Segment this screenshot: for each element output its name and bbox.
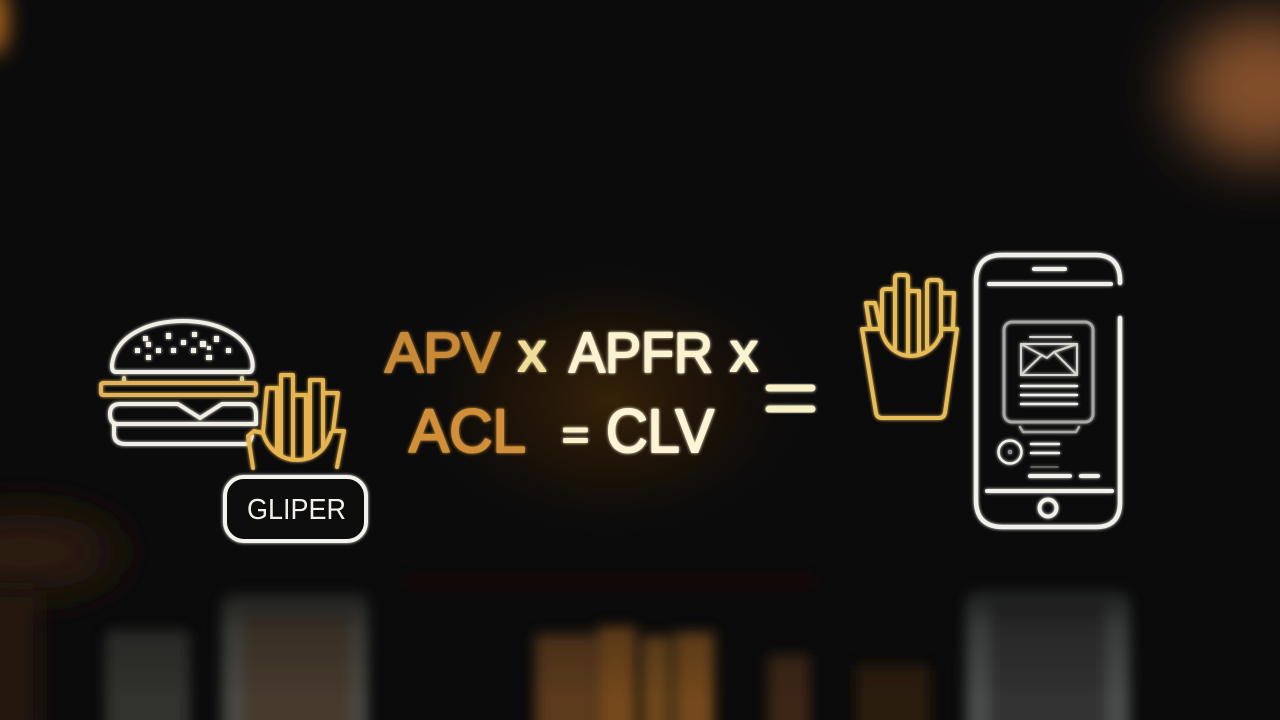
phone body (976, 255, 1120, 527)
icon: burger (101, 321, 256, 444)
multiply sign: x (730, 320, 758, 383)
reflection of phone (966, 590, 1130, 720)
large equals sign (769, 388, 812, 409)
burger cheese and lower bun (110, 404, 256, 424)
home button (1040, 500, 1056, 516)
icon: fries box (862, 275, 957, 418)
screen card (1004, 322, 1093, 422)
term APV: APV (385, 321, 500, 385)
term APFR: APFR (569, 321, 713, 385)
icon: fries beside burger (248, 375, 344, 468)
faint reflection left (105, 630, 190, 720)
phone top speaker and bars (989, 269, 1111, 284)
reflection of formula (535, 626, 714, 720)
formula (385, 320, 758, 465)
profile text lines (1031, 444, 1059, 453)
multiply sign: x (518, 320, 546, 383)
term ACL: ACL (409, 397, 526, 465)
badge: GLIPER: GLIPER (247, 494, 346, 526)
envelope icon (1021, 337, 1077, 375)
card tab (1020, 427, 1079, 432)
burger gold patty (101, 378, 256, 395)
badge: GLIPER (225, 477, 366, 541)
reflection of burger badge (222, 592, 368, 720)
sesame seeds (135, 332, 231, 360)
equals sign: = (562, 411, 589, 458)
bottom bar (987, 489, 1112, 493)
card text lines (1021, 386, 1077, 404)
floor reflections (105, 590, 1130, 720)
icon: smartphone (976, 255, 1120, 527)
burger top bun (112, 321, 253, 372)
profile circle (998, 440, 1022, 464)
term CLV: CLV (606, 397, 714, 465)
